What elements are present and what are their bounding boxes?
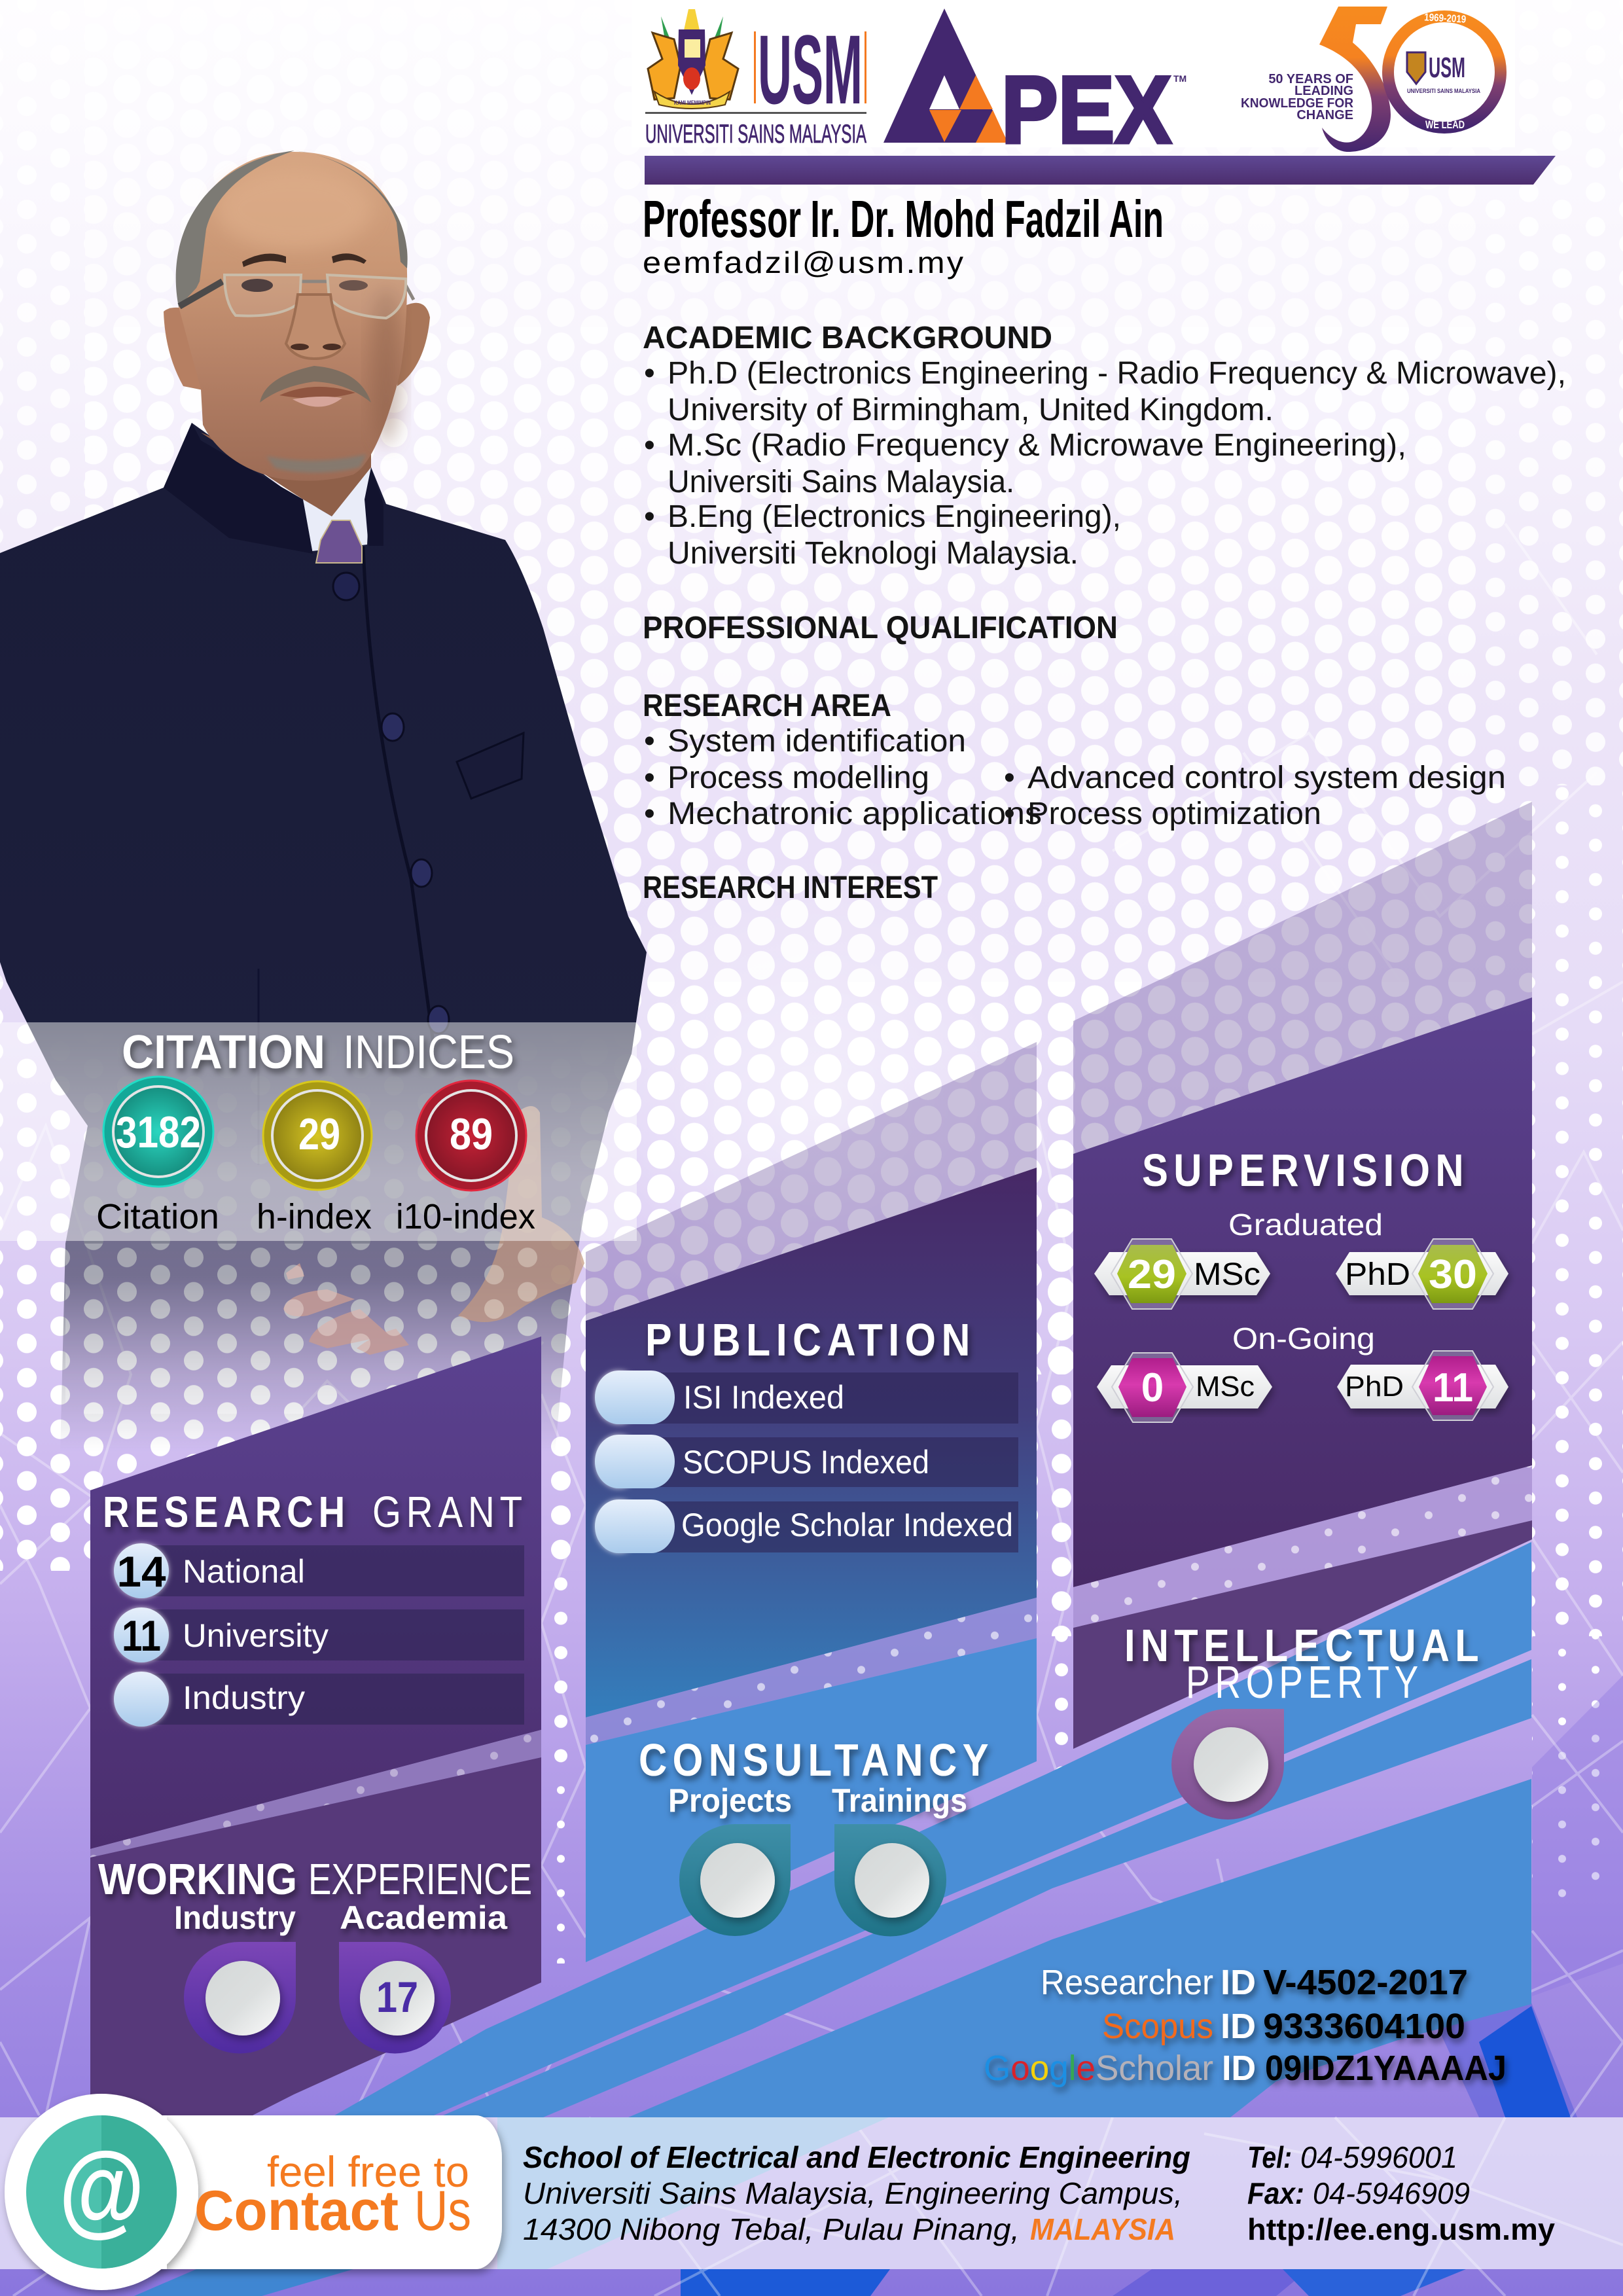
research area: Process modelling: [668, 761, 929, 795]
ghost strips: [586, 802, 1532, 1322]
panel: research grant: [90, 1336, 541, 1857]
sublabels: [668, 1782, 967, 1819]
researcher id: [1041, 1963, 1468, 2002]
google scholar id: ID: [1222, 2049, 1256, 2088]
row: SCOPUS: [595, 1435, 1018, 1488]
research area: •: [644, 761, 655, 795]
citation labels: i10-index: [396, 1197, 535, 1236]
text: USM: [758, 14, 863, 124]
row: SCOPUS: SCOPUS Indexed: [683, 1444, 929, 1480]
drop: intellectual property: [1171, 1709, 1284, 1820]
google scholar id: Scholar: [1096, 2049, 1213, 2088]
badge: graduated PhD: [1336, 1239, 1508, 1309]
row: Google Scholar: [595, 1499, 1018, 1553]
contact call to action: Contact: [194, 2179, 399, 2242]
row: Google Scholar: Google Scholar Indexed: [681, 1507, 1013, 1543]
sublabels: [174, 1899, 508, 1936]
tagline: 50 YEARS OF: [1268, 72, 1353, 86]
researcher id: V-4502-2017: [1263, 1963, 1468, 2002]
citation heading: CITATION: [122, 1026, 325, 1079]
icon: at sign: @: [59, 2131, 145, 2246]
badge: graduated MSc: MSc: [1194, 1257, 1260, 1292]
panel: citation indices: [0, 1022, 637, 1241]
phone, fax, web: http://ee.eng.usm.my: [1247, 2212, 1555, 2246]
badge: citation: 3182: [116, 1107, 201, 1157]
academic background: University of Birmingham, United Kingdom.: [668, 393, 1274, 427]
tagline: CHANGE: [1296, 108, 1353, 122]
glasses: [179, 281, 223, 306]
row: industry: Industry: [183, 1679, 305, 1716]
research area: RESEARCH AREA: [643, 689, 891, 723]
blue bands: [331, 1542, 1531, 2117]
logo: APEX: [883, 9, 1186, 163]
logo: 50 years: 1969-2019: [1424, 12, 1467, 26]
heading: PUBLICATION: [645, 1314, 976, 1365]
badge: i10-index: 89: [450, 1109, 493, 1159]
drop: academia: [339, 1942, 451, 2053]
panel: consultancy: [586, 1638, 1037, 1962]
row: national: National: [183, 1553, 305, 1590]
subheading: PROPERTY: [1186, 1657, 1423, 1708]
academic background: Universiti Sains Malaysia.: [668, 465, 1014, 499]
citation labels: [96, 1197, 535, 1236]
heading: [98, 1855, 532, 1904]
sublabels: Academia: [340, 1899, 508, 1936]
contact call to action: Us: [414, 2179, 471, 2242]
contact call to action: feel free to: [267, 2147, 469, 2196]
heading: RESEARCH: [103, 1488, 350, 1537]
eyes: [242, 253, 366, 267]
professional qualification: PROFESSIONAL QUALIFICATION: [643, 611, 1118, 645]
row: national: [114, 1543, 524, 1598]
logo: APEX: PEX: [1001, 56, 1171, 163]
right hand: [458, 1106, 584, 1322]
research area: [643, 689, 1506, 831]
badge: i10-index: [416, 1081, 526, 1191]
academic background: M.Sc (Radio Frequency & Microwave Engineering),: [668, 428, 1406, 463]
badge: graduated MSc: 29: [1128, 1252, 1176, 1297]
small crest and USM: [1407, 52, 1480, 94]
fingers: [283, 1263, 409, 1355]
moustache and mouth: [260, 366, 371, 403]
logo: 50 years: [1241, 7, 1501, 152]
white logo backdrop: [632, 0, 1515, 147]
translucent band: [0, 1022, 637, 1241]
academic background: [643, 321, 1566, 571]
scopus id: 9333604100: [1263, 2007, 1465, 2046]
tagline: LEADING: [1294, 84, 1353, 98]
phone, fax, web: [1247, 2140, 1555, 2246]
research area: Process optimization: [1027, 797, 1321, 831]
badge: on-going MSc: [1097, 1353, 1272, 1422]
research area: System identification: [668, 724, 966, 759]
phone, fax, web: Fax:: [1247, 2176, 1304, 2210]
heading: CONSULTANCY: [639, 1734, 994, 1785]
academic background: ACADEMIC BACKGROUND: [643, 321, 1052, 355]
researcher id: Researcher: [1041, 1963, 1213, 2002]
row: industry: [114, 1672, 524, 1727]
drop: projects: [679, 1824, 791, 1936]
academic background: Ph.D (Electronics Engineering - Radio Frequency & Microwave),: [668, 356, 1566, 391]
research area: •: [644, 724, 655, 759]
heading: WORKING: [98, 1855, 297, 1904]
phone, fax, web: Tel:: [1247, 2140, 1292, 2174]
badge: on-going PhD: [1337, 1351, 1508, 1420]
on-going label: On-Going: [1232, 1321, 1375, 1355]
research area: •: [644, 797, 655, 831]
badge: graduated PhD: 30: [1429, 1252, 1477, 1297]
school address: MALAYSIA: [1030, 2212, 1175, 2246]
citation labels: Citation: [96, 1197, 219, 1236]
crest: KAMI MEMIMPIN: [674, 99, 711, 106]
small crest and USM: UNIVERSITI SAINS MALAYSIA: [1407, 88, 1480, 94]
heading: [103, 1488, 527, 1537]
jacket: [0, 423, 647, 1505]
icon: at sign: [26, 2115, 177, 2269]
scopus id: Scopus: [1102, 2007, 1213, 2046]
research area: •: [1004, 761, 1015, 795]
academic background: Universiti Teknologi Malaysia.: [668, 536, 1079, 571]
heading: GRANT: [372, 1488, 527, 1537]
ears: [164, 308, 203, 390]
web lines background: [0, 524, 1623, 2296]
row: ISI: [595, 1371, 1018, 1424]
badge: citation: [103, 1077, 213, 1187]
panel: intellectual property: [1073, 1520, 1532, 1820]
hair: [176, 151, 294, 307]
tie: [316, 520, 362, 563]
crest: [648, 9, 738, 109]
drop: industry: [184, 1942, 296, 2053]
university name: UNIVERSITI SAINS MALAYSIA: [645, 120, 866, 149]
research interest: RESEARCH INTEREST: [643, 870, 938, 905]
nose: [286, 295, 345, 359]
tagline: KNOWLEDGE FOR: [1241, 96, 1354, 111]
small crest and USM: USM: [1429, 52, 1465, 84]
panel: working experience: [90, 1757, 541, 2117]
researcher id: ID: [1221, 1963, 1256, 2002]
scopus id: ID: [1221, 2007, 1256, 2046]
heading: SUPERVISION: [1142, 1145, 1469, 1196]
badge: on-going MSc: 0: [1141, 1365, 1164, 1410]
tagline: [1241, 72, 1354, 122]
google scholar id: [984, 2049, 1507, 2088]
google scholar id: 09IDZ1YAAAAJ: [1265, 2049, 1507, 2088]
citation labels: h-index: [257, 1197, 372, 1236]
logo: APEX: TM: [1173, 73, 1186, 84]
face: [177, 152, 407, 481]
badge: on-going MSc: MSc: [1196, 1371, 1255, 1403]
row: university: 11: [122, 1611, 161, 1660]
google scholar id: Google: [984, 2049, 1096, 2088]
badge: graduated PhD: PhD: [1345, 1257, 1410, 1292]
researcher identifiers: [984, 1963, 1507, 2088]
ghost dots over jacket: [65, 1244, 541, 1414]
USM wordmark: [754, 14, 866, 124]
neck: [201, 433, 371, 516]
email: eemfadzil@usm.my: [643, 245, 965, 279]
sublabels: Projects: [668, 1782, 792, 1819]
badge: graduated MSc: [1094, 1239, 1270, 1309]
portrait photo: [0, 151, 647, 1505]
row: ISI: ISI Indexed: [683, 1379, 844, 1416]
academic background: •: [644, 356, 655, 391]
graduated label: Graduated: [1228, 1208, 1383, 1242]
drop: academia: 17: [376, 1973, 418, 2021]
sublabels: Trainings: [832, 1782, 967, 1819]
contact call to action: [194, 2147, 471, 2242]
badge: on-going PhD: 11: [1433, 1365, 1473, 1410]
row: university: [114, 1607, 524, 1662]
academic background: •: [644, 499, 655, 534]
panel: supervision: [1073, 997, 1532, 1628]
logo: 50 years: WE LEAD: [1425, 118, 1465, 131]
contact white tab: [5, 2094, 502, 2290]
phone, fax, web: 04-5946909: [1313, 2176, 1470, 2210]
heading: INTELLECTUAL: [1124, 1620, 1484, 1671]
badge: h-index: 29: [298, 1109, 340, 1159]
heading: EXPERIENCE: [308, 1855, 532, 1904]
school address: [523, 2140, 1190, 2246]
scopus id: [1102, 2007, 1465, 2046]
header bar: [645, 156, 1556, 185]
school address: 14300 Nibong Tebal, Pulau Pinang,: [523, 2212, 1020, 2246]
row: national: 14: [116, 1547, 166, 1596]
logo: Universiti Sains Malaysia: [645, 9, 866, 149]
phone, fax, web: 04-5996001: [1300, 2140, 1457, 2174]
contact bar: [0, 2094, 1623, 2290]
school address: Universiti Sains Malaysia, Engineering Campus,: [523, 2176, 1183, 2210]
panel: publication: [586, 1168, 1037, 1745]
row: university: University: [183, 1617, 329, 1654]
citation heading: [122, 1026, 514, 1079]
collar: [164, 423, 383, 554]
academic background: •: [644, 428, 655, 463]
badge: on-going PhD: PhD: [1345, 1371, 1404, 1403]
shirt: [201, 433, 371, 551]
citation heading: INDICES: [343, 1026, 514, 1079]
school address: School of Electrical and Electronic Engineering: [523, 2140, 1190, 2174]
research area: •: [1004, 797, 1015, 831]
research area: Advanced control system design: [1027, 761, 1506, 795]
name: Professor Ir. Dr. Mohd Fadzil Ain: [643, 190, 1164, 248]
academic background: B.Eng (Electronics Engineering),: [668, 499, 1121, 534]
drop: trainings: [834, 1824, 946, 1937]
research area: Mechatronic applications: [668, 797, 1042, 831]
badge: h-index: [263, 1081, 372, 1190]
sublabels: Industry: [174, 1899, 296, 1936]
